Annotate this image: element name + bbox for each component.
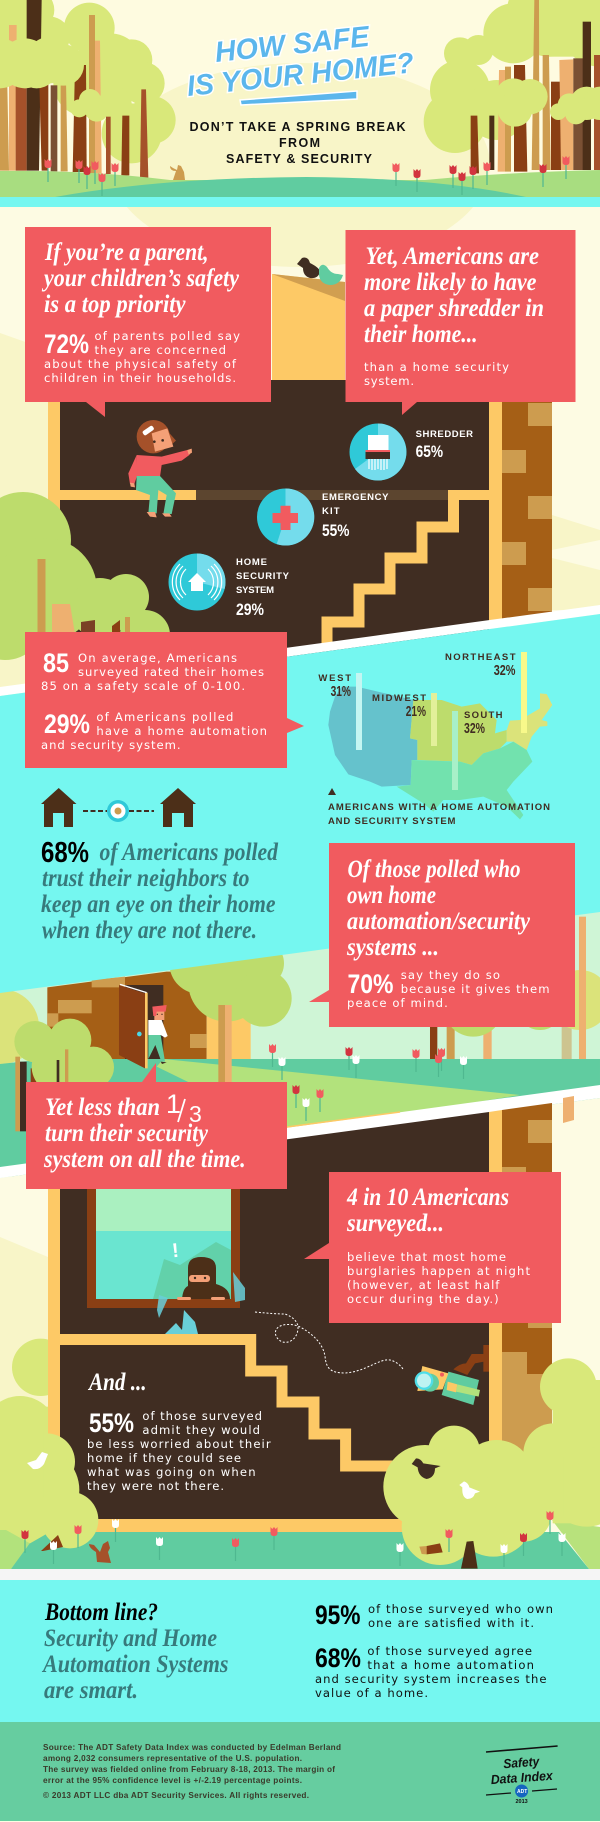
callout: parents: of parents polled say [94,329,240,343]
map legend: AMERICANS WITH A HOME AUTOMATION [328,802,550,813]
callout: parents [25,227,271,417]
cyan section background [0,614,600,993]
logo: safety data index: Safety [503,1754,540,1771]
text: trust neighbors [41,837,279,944]
stub left [41,1535,63,1551]
callout: parents: 72% [44,329,89,359]
floor beam [60,490,196,500]
region map: 31% [331,684,351,700]
icon: home security pie [168,554,226,610]
region map: 32% [464,721,485,737]
bottom line stats: and security system increases the [315,1672,546,1686]
callout: less than one third [26,1063,287,1189]
tulips [22,1511,566,1567]
callout: less than one third: 1 [166,1089,181,1119]
tree by door [169,933,292,1085]
background right trees [0,989,39,1064]
title: HOW SAFE [213,21,373,69]
text: And ...: they were not there. [87,1479,224,1493]
logo: safety data index [486,1746,558,1805]
callout: burglaries: occur during the day.) [347,1292,499,1306]
source text: among 2,032 consumers representative of the U.S. population. [43,1754,302,1763]
text: And ...: what was going on when [87,1465,256,1479]
header tulips [44,156,570,196]
text: trust neighbors: keep an eye on their home [41,889,276,918]
callout: peace of mind: automation/security [347,906,531,935]
source text [43,1743,341,1800]
callout: safety rating: 29% [44,709,90,739]
left tree [0,492,170,660]
icon: neighbor houses with eye [41,788,196,827]
bottom line stats: of those surveyed agree [367,1644,532,1658]
bottom line stats [315,1600,553,1700]
brick wall [502,1103,552,1460]
bottom line heading: Bottom line? [44,1597,158,1626]
callout: peace of mind: 70% [348,969,394,999]
text: And ... [87,1367,271,1493]
callout: burglaries: believe that most home [347,1250,506,1264]
subtitle: SAFETY & SECURITY [226,152,373,166]
subtitle [190,120,406,166]
region map [318,652,552,819]
door [119,984,148,1068]
callout: parents: your children’s safety [41,263,240,292]
hills [0,170,600,197]
stat: shredder [350,424,473,480]
bottom line heading [41,1597,229,1704]
header scene [0,0,600,267]
text: trust neighbors: when they are not there. [42,915,257,944]
lower floor of house [48,1096,574,1532]
brick wall [502,395,552,620]
source text: error at the 95% confidence level is +/-2.19 percentage points. [43,1776,302,1785]
subtitle: FROM [279,136,320,150]
text: And ...: of those surveyed [142,1409,262,1423]
white band over upper floor [0,605,600,696]
stat: shredder: SHREDDER [416,429,473,440]
house exterior [47,972,207,1059]
stat: shredder: 65% [416,442,443,461]
interior [60,380,489,660]
callout: less than one third: 3 [189,1101,202,1127]
bottom line stats: value of a home. [315,1686,428,1700]
house upper floor [0,274,600,700]
man [148,1005,168,1064]
stat: emergency kit: KIT [322,506,340,517]
icon: security camera [415,1345,489,1405]
callout: paper shredder: system. [364,374,414,388]
window [87,1185,240,1308]
left forest [0,0,176,178]
callout: less than one third: system on all the time. [43,1144,246,1173]
bottom line stats: 68% [315,1643,361,1673]
camera motion trail [255,1312,403,1373]
stat: home security system: SYSTEM [236,585,274,596]
panel: footer [0,1722,600,1821]
text: And ...: home if they could see [87,1451,241,1465]
bottom line heading: Security and Home [44,1623,217,1652]
callout: peace of mind: say they do so [401,968,500,982]
bottom line stats: 95% [315,1600,360,1630]
character: girl [128,420,192,517]
icon: emergency pie [257,488,314,546]
stat: emergency kit: EMERGENCY [322,492,389,503]
callout: peace of mind: systems ... [346,932,439,961]
broken glass [157,1272,245,1334]
text: trust neighbors: of Americans polled [100,837,279,866]
text: And ...: admit they would [142,1423,260,1437]
panel: bottom line [0,1580,600,1722]
bottom edge [0,1821,600,1822]
callout: safety rating: 85 on a safety scale of 0-100. [41,679,245,693]
window: ! [171,1240,180,1262]
meadow tulips [269,1044,467,1121]
burglar [177,1257,230,1300]
callout: safety rating: and security system. [41,738,181,752]
text: And ...: And ... [87,1367,147,1396]
callout: safety rating: of Americans polled [96,710,233,724]
callout: safety rating: surveyed rated their homes [78,665,264,679]
callout: burglaries: burglaries happen at night [347,1264,530,1278]
icon: birds in bushes [27,1452,480,1499]
ground and bushes [0,1358,600,1569]
door scene [0,900,600,1190]
logo: safety data index: ADT [517,1789,527,1795]
region map: 21% [406,704,426,720]
back bushes behind wall [0,1237,69,1473]
callout: paper shredder: Yet, Americans are [366,241,539,270]
left bushes [0,1430,98,1548]
callout: safety rating: have a home automation [96,724,267,738]
region map: SOUTH [464,710,503,721]
callout: less than one third: Yet less than [45,1092,160,1121]
callout: peace of mind: peace of mind. [347,996,448,1010]
stat: home security system: SECURITY [236,571,290,582]
callout: parents: is a top priority [44,289,186,318]
bottom line stats: of those surveyed who own [368,1602,553,1616]
callout: parents: children in their households. [44,371,236,385]
callout: safety rating: On average, Americans [78,651,237,665]
callout: burglaries: 4 in 10 Americans [346,1182,509,1211]
text: trust neighbors: trust their neighbors to [42,863,250,892]
callout: peace of mind: Of those polled who [348,854,520,883]
text: And ...: be less worried about their [87,1437,271,1451]
callout: peace of mind [309,843,575,1027]
stairs [60,1340,405,1466]
icon: squirrel [170,165,185,180]
callout: paper shredder [346,230,576,415]
title [185,21,416,103]
white band above lower floor [0,1085,600,1822]
source text: The survey was fielded online from February 8-18, 2013. The margin of [43,1765,335,1774]
callout: paper shredder: than a home security [364,360,509,374]
tree left [14,1019,114,1093]
callout: less than one third: turn their security [45,1118,209,1147]
stairs [327,490,454,645]
map legend: AND SECURITY SYSTEM [328,816,455,827]
stat: emergency kit [257,488,389,546]
text: trust neighbors: 68% [41,837,89,869]
callout: parents: they are concerned [94,343,226,357]
stat: home security system: 29% [236,600,264,619]
callout: safety rating [25,632,304,768]
stat: home security system: HOME [236,557,267,568]
icon: squirrel [89,1541,111,1563]
region map: WEST [318,673,351,684]
logo: safety data index: 2013 [516,1799,528,1805]
callout: burglaries: (however, at least half [347,1278,500,1292]
bottom line heading: are smart. [44,1675,138,1704]
source text: © 2013 ADT LLC dba ADT Security Services. All rights reserved. [43,1791,309,1800]
separator strip [0,1569,600,1580]
title: IS YOUR HOME? [185,47,416,103]
icon: shredder pie [350,424,406,480]
callout: parents: about the physical safety of [44,357,237,371]
teal strip [0,197,600,207]
region map: NORTHEAST [445,652,516,663]
region map: 32% [494,663,516,679]
callout: paper shredder: more likely to have [364,267,536,296]
birds on roof [297,258,343,285]
stat: home security system [168,554,290,619]
callout: safety rating: 85 [43,648,69,678]
source text: Source: The ADT Safety Data Index was conducted by Edelman Berland [43,1743,341,1752]
logo: safety data index: Data Index [490,1768,554,1787]
callout: paper shredder: their home... [364,319,478,348]
region map: MIDWEST [372,693,426,704]
callout: burglaries: surveyed... [346,1208,444,1237]
callout: parents: If you’re a parent, [44,237,209,266]
right forest [424,0,600,173]
callout: burglaries [304,1172,561,1323]
left trunks [15,1057,20,1131]
roof [272,274,345,380]
stat: emergency kit: 55% [322,521,349,540]
title underline [240,91,357,105]
ground [0,1059,600,1177]
text: And ...: 55% [89,1408,134,1438]
callout: paper shredder: a paper shredder in [364,293,544,322]
bottom line stats: one are satisfied with it. [368,1616,534,1630]
bottom line heading: Automation Systems [41,1649,229,1678]
bottom line stats: that a home automation [367,1658,534,1672]
callout: peace of mind: own home [347,880,436,909]
callout: peace of mind: because it gives them [401,982,550,996]
right bushes [383,1358,600,1565]
subtitle: DON’T TAKE A SPRING BREAK [190,120,406,134]
map legend [328,788,550,827]
